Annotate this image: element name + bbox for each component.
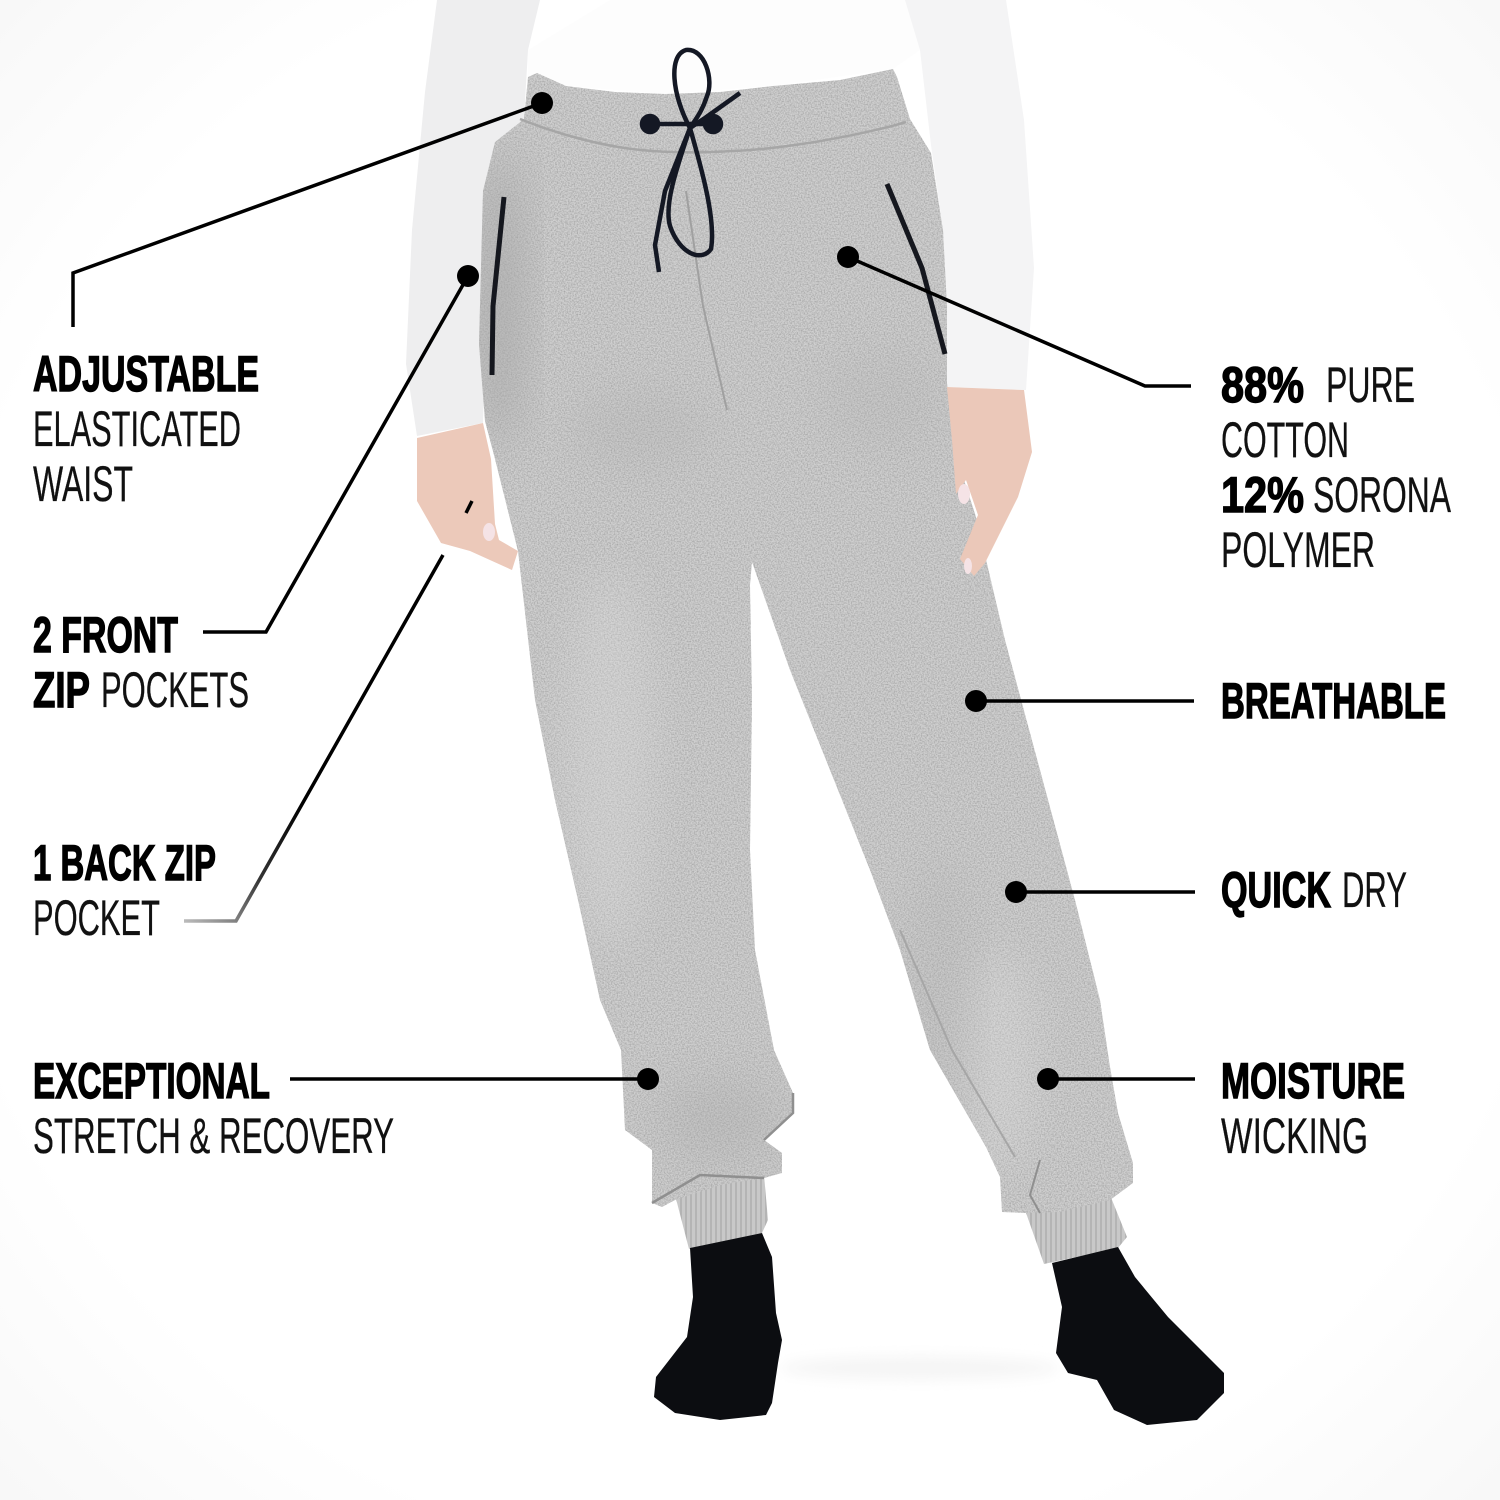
photo: model wearing joggers: [406, 0, 1224, 1425]
label: WICKING: [1221, 1108, 1368, 1164]
label: ELASTICATED: [33, 401, 241, 457]
label: WAIST: [33, 456, 133, 512]
label: POCKET: [33, 890, 160, 946]
dot: [1037, 1068, 1059, 1090]
left cuff folds: [652, 1093, 793, 1203]
fabric shading: [478, 150, 1035, 1170]
label: [33, 835, 216, 946]
dot: [965, 690, 987, 712]
label: 88%: [1221, 357, 1304, 413]
label: 1 BACK ZIP: [33, 835, 216, 891]
label: COTTON: [1221, 412, 1349, 468]
leader line: [1048, 1077, 1195, 1081]
leader line: [73, 103, 542, 327]
label: [33, 607, 249, 718]
label: [33, 346, 259, 512]
leader line: [203, 276, 468, 632]
callout: fabric composition: [837, 246, 1451, 578]
callout: 2 front zip pockets: [33, 265, 479, 718]
label: 2 FRONT: [33, 607, 178, 663]
joggers: [479, 69, 1133, 1213]
label: [33, 1053, 394, 1164]
front seam: [686, 191, 727, 410]
leader line: [976, 699, 1194, 703]
floor shadow: [780, 1356, 1060, 1380]
dot: [1005, 881, 1027, 903]
dot: [457, 265, 479, 287]
right zip pocket: [887, 184, 945, 354]
label: PURE: [1326, 357, 1415, 413]
leader line: [1016, 890, 1195, 894]
leader line: [290, 1077, 648, 1081]
left zip pocket: [492, 197, 504, 375]
callout: exceptional stretch and recovery: [33, 1053, 659, 1164]
label: ZIP: [33, 662, 90, 718]
callout: adjustable elasticated waist: [33, 92, 553, 512]
label: 12%: [1221, 467, 1304, 523]
fingernails: [483, 484, 972, 574]
white shirt torso: [528, 0, 920, 94]
left cuff rib: [675, 1175, 768, 1249]
left sock: [654, 1233, 782, 1420]
dot: [837, 246, 859, 268]
label: [1221, 357, 1451, 578]
drawstring: [642, 50, 740, 272]
label: POCKETS: [101, 662, 249, 718]
right leg fold: [900, 930, 1015, 1157]
callout: breathable: [965, 673, 1446, 729]
leader line: [848, 257, 1191, 386]
right cuff fold: [1030, 1160, 1040, 1213]
left sleeve: [406, 0, 540, 436]
label: STRETCH & RECOVERY: [33, 1108, 394, 1164]
callout: moisture wicking: [1037, 1053, 1405, 1164]
label: MOISTURE: [1221, 1053, 1405, 1109]
waistband seam: [520, 119, 906, 152]
dot: [637, 1068, 659, 1090]
right sleeve: [895, 0, 1034, 390]
right cuff rib: [1025, 1195, 1127, 1264]
right hand: [947, 387, 1032, 576]
callout: 1 back zip pocket: [33, 501, 472, 946]
label: POLYMER: [1221, 522, 1375, 578]
label: [1221, 1053, 1405, 1164]
label: DRY: [1342, 862, 1407, 918]
label: QUICK: [1221, 862, 1331, 918]
label: ADJUSTABLE: [33, 346, 259, 402]
callout: quick dry: [1005, 862, 1407, 918]
dot: [531, 92, 553, 114]
left hand: [417, 423, 518, 570]
leader line: [184, 501, 472, 921]
right sock: [1052, 1247, 1224, 1425]
label: EXCEPTIONAL: [33, 1053, 270, 1109]
